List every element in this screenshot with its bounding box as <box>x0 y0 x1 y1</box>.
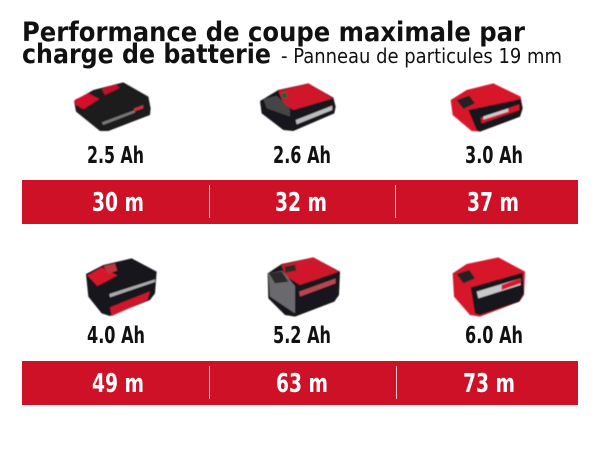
title: Performance de coupe maximale par <box>22 17 526 48</box>
icon: 4.0 Ah battery <box>86 258 157 316</box>
value: 37 m: 37 m <box>467 188 519 218</box>
title: charge de batterie <box>22 39 271 70</box>
icon: 5.2 Ah battery <box>268 257 340 317</box>
subtitle: - Panneau de particules 19 mm <box>281 44 562 68</box>
label: 2.6 Ah: 2.6 Ah <box>273 143 331 169</box>
label: 3.0 Ah: 3.0 Ah <box>465 143 523 169</box>
label: 2.5 Ah: 2.5 Ah <box>87 143 144 169</box>
value: 32 m: 32 m <box>275 188 327 218</box>
label: 5.2 Ah: 5.2 Ah <box>273 323 331 349</box>
icon: 2.5 Ah battery <box>74 82 151 131</box>
value: 49 m: 49 m <box>92 369 144 399</box>
title <box>22 17 562 70</box>
value: 73 m: 73 m <box>463 369 515 399</box>
bar: row 1 results <box>22 180 578 224</box>
icon: 2.6 Ah battery <box>260 83 336 131</box>
icon: 6.0 Ah battery <box>453 257 525 317</box>
label: 4.0 Ah: 4.0 Ah <box>87 323 145 349</box>
icon: 3.0 Ah battery <box>451 83 523 132</box>
value: 30 m: 30 m <box>92 188 144 218</box>
bar: row 2 results <box>22 361 578 405</box>
value: 63 m: 63 m <box>276 369 328 399</box>
label: 6.0 Ah: 6.0 Ah <box>465 323 523 349</box>
